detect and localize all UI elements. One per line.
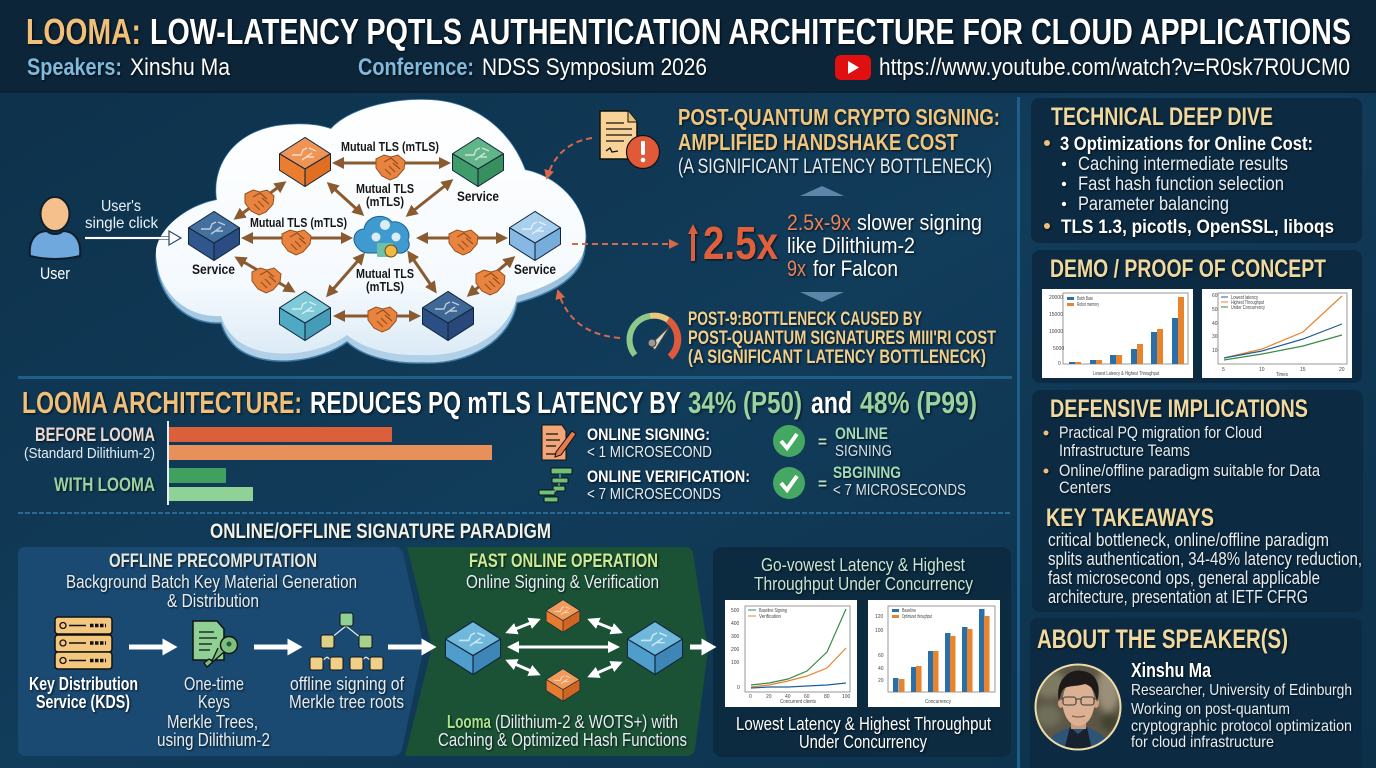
icon: youtube — [835, 55, 871, 80]
heading: Looma architecture — [22, 385, 977, 420]
icon: central cloud with lock — [354, 216, 409, 257]
line chart: demo: Lowest latency — [1231, 295, 1258, 301]
bar chart: throughput: 40 — [878, 666, 884, 672]
result verification text: = — [818, 476, 827, 493]
defensive list: Online/offline paradigm suitable for Data — [1059, 461, 1320, 480]
bar chart: demo: Lowest Latency & Highest Throughput — [1093, 371, 1159, 377]
dashed callout arrows — [547, 138, 677, 338]
bar chart: throughput: 20 — [878, 678, 884, 684]
line chart: demo: Under Concurrency — [1231, 305, 1265, 311]
speakers line: Speakers: — [27, 54, 122, 81]
icon: online verification — [539, 468, 572, 502]
icon: check 1 — [773, 425, 805, 457]
line chart: latency: Verification — [759, 614, 781, 620]
result signing text — [818, 424, 892, 460]
online signing text: ONLINE SIGNING: — [587, 425, 710, 444]
icon: merkle tree — [310, 613, 383, 670]
speaker bio: Working on post-quantum — [1131, 701, 1290, 718]
line chart: latency: 500 — [731, 608, 740, 614]
panel: latency results — [713, 547, 1011, 757]
callout: post-quantum signing cost: AMPLIFIED HANDSHAKE COST — [678, 129, 958, 155]
takeaways text: fast microsecond ops, general applicable — [1048, 568, 1320, 588]
icon: down triangle — [800, 292, 844, 302]
stat description: for Falcon — [813, 256, 898, 281]
bar chart: throughput: 60 — [878, 653, 884, 659]
speaker bio: for cloud infrastructure — [1131, 734, 1274, 751]
label: key distribution service: Key Distribution — [29, 674, 138, 694]
online verification text: < 7 MICROSECONDS — [587, 486, 721, 503]
line chart: latency: 0 — [749, 694, 752, 700]
label: one-time keys: Keys — [198, 692, 230, 712]
bar chart: before and with Looma — [24, 421, 492, 505]
arrow: online to results — [690, 644, 702, 650]
arrow 1 — [129, 644, 163, 650]
bar chart: throughput — [868, 600, 1000, 707]
labels: service and mTLS: (mTLS) — [366, 279, 404, 294]
line chart: latency: 300 — [731, 634, 740, 640]
icon: check 2 — [773, 467, 805, 499]
line chart: latency: 40 — [785, 694, 791, 700]
deep dive list — [1044, 134, 1334, 238]
online heading: FAST ONLINE OPERATION — [469, 551, 658, 572]
online description — [438, 712, 687, 750]
icon: key distribution server — [55, 617, 112, 669]
offline subheading — [66, 572, 357, 611]
conference line: Conference: — [358, 54, 474, 81]
offline subheading: Background Batch Key Material Generation — [66, 572, 357, 592]
online description: Looma — [447, 712, 492, 732]
defensive list — [1044, 423, 1320, 497]
panel: fast online operation — [405, 547, 708, 756]
line chart: demo: 50 — [1212, 307, 1218, 313]
icon: handshakes — [245, 155, 505, 332]
speaker name: Xinshu Ma — [1131, 660, 1212, 682]
panel: demo — [1032, 250, 1362, 383]
bar chart: demo: 20000 — [1049, 295, 1063, 301]
labels: service and mTLS: Service — [514, 261, 556, 277]
line chart: latency: Baseline Signing — [759, 608, 787, 614]
line chart: demo: Highest Throughput — [1231, 300, 1264, 306]
heading: Looma architecture: 48% (P99) — [860, 385, 977, 420]
heading: signature paradigm: ONLINE/OFFLINE SIGNATURE PARADIGM — [210, 520, 551, 543]
results caption — [736, 714, 991, 752]
labels: service and mTLS: Mutual TLS — [356, 266, 414, 281]
results heading — [754, 555, 973, 594]
line chart: demo: 30 — [1212, 334, 1218, 340]
labels: service and mTLS: Service — [192, 261, 235, 277]
offline subheading: & Distribution — [167, 591, 259, 611]
arrow: user to service — [85, 231, 181, 245]
line chart: demo: 10 — [1212, 348, 1218, 354]
bar chart: throughput: 100 — [875, 628, 884, 634]
line chart: latency: 100 — [731, 660, 740, 666]
deep dive list: Caching intermediate results — [1078, 154, 1288, 175]
arrow 3: offline to online — [388, 644, 422, 650]
line chart: demo: 10 — [1259, 367, 1265, 373]
takeaways heading: KEY TAKEAWAYS — [1046, 504, 1214, 532]
deep dive list: 3 Optimizations for Online Cost: — [1060, 134, 1313, 155]
labels: service and mTLS: Mutual TLS — [356, 181, 414, 196]
label: one-time keys: Merkle Trees, — [167, 712, 258, 732]
speaker photo — [1034, 664, 1122, 752]
heading: Looma architecture: and — [811, 385, 852, 420]
bar chart: demo: Batch Base — [1077, 296, 1093, 302]
defensive list: Practical PQ migration for Cloud — [1059, 423, 1262, 442]
icon: online cubes — [446, 600, 682, 701]
line chart: latency: 200 — [731, 647, 740, 653]
panel: defensive implications and takeaways — [1032, 390, 1363, 612]
stat: 2.5x: 2.5x — [703, 217, 778, 269]
line chart: latency: 400 — [731, 621, 740, 627]
callout: post-quantum signing cost: POST-QUANTUM CRYPTO SIGNING: — [678, 104, 1000, 130]
speaker heading: ABOUT THE SPEAKER(S) — [1037, 624, 1288, 654]
bar chart: throughput: Optimized throughput — [902, 614, 932, 620]
defensive list: Centers — [1059, 478, 1111, 497]
icon: service cubes — [189, 138, 560, 340]
defensive heading: DEFENSIVE IMPLICATIONS — [1050, 395, 1308, 423]
labels: service and mTLS: Mutual TLS (mTLS) — [250, 215, 347, 230]
callout: bottleneck: POST-QUANTUM SIGNATURES MIII'RI COST — [688, 328, 996, 349]
line chart: demo: Times — [1276, 372, 1288, 378]
label: one-time keys — [157, 674, 270, 750]
label: one-time keys: using Dilithium-2 — [157, 730, 270, 750]
label: offline signing: Merkle tree roots — [289, 692, 404, 712]
icon: up triangle — [800, 186, 844, 196]
labels: service and mTLS — [192, 139, 556, 294]
bar chart: demo: Robot memory — [1077, 302, 1099, 308]
callout: bottleneck — [688, 309, 996, 368]
results caption: Under Concurrency — [799, 732, 927, 752]
arrows: online exchange — [508, 620, 620, 676]
click label — [85, 198, 159, 232]
result signing text: ONLINE — [835, 424, 888, 443]
callout: bottleneck: POST-9:BOTTLENECK CAUSED BY — [688, 309, 922, 330]
offline heading: OFFLINE PRECOMPUTATION — [109, 551, 317, 572]
deep dive list: Parameter balancing — [1078, 194, 1229, 215]
result verification text: SBGINING — [833, 463, 901, 482]
icon: user: User — [40, 264, 70, 283]
takeaways text — [1048, 530, 1362, 607]
heading: Looma architecture: 34% (P50) — [688, 385, 802, 420]
panel: mTLS cloud diagram — [30, 100, 677, 363]
labels: service and mTLS: (mTLS) — [366, 194, 404, 209]
panel: offline precomputation — [18, 547, 424, 756]
stat description: like Dilithium-2 — [787, 233, 915, 258]
conference line — [358, 54, 707, 81]
icon: online signing — [542, 425, 576, 460]
result signing text: SIGNING — [835, 443, 892, 460]
online description: (Dilithium-2 & WOTS+) with — [495, 712, 678, 732]
stat description: slower signing — [857, 210, 982, 235]
cloud — [156, 100, 586, 363]
line chart: latency: 80 — [824, 694, 830, 700]
labels: service and mTLS: Service — [457, 188, 499, 204]
bar chart: throughput: Baseline — [902, 608, 916, 614]
label: one-time keys: One-time — [184, 674, 244, 694]
line chart: demo: 60 — [1212, 293, 1218, 299]
line chart: latency: 0 — [737, 685, 740, 691]
results heading: Go-vowest Latency & Highest — [761, 555, 965, 575]
icon: signature document warning — [600, 111, 660, 168]
bar chart: demo: 0 — [1058, 361, 1061, 367]
click label: single click — [85, 215, 159, 232]
deep dive list: Fast hash function selection — [1078, 174, 1284, 195]
line chart: demo: 20 — [1339, 367, 1345, 373]
speakers line — [27, 54, 231, 81]
line chart: latency: 60 — [804, 694, 810, 700]
labels: service and mTLS: Mutual TLS (mTLS) — [341, 139, 439, 154]
callout: bottleneck: (A SIGNIFICANT LATENCY BOTTLENECK) — [688, 347, 986, 368]
speaker bio — [1131, 682, 1352, 751]
bar chart: demo: 10000 — [1049, 329, 1063, 335]
line chart: latency — [725, 600, 857, 707]
result verification text: < 7 MICROSECONDS — [833, 482, 966, 499]
bar chart: before and with Looma: (Standard Dilithium-2) — [24, 445, 155, 462]
bar chart: throughput: 120 — [875, 614, 884, 620]
heading: Looma architecture: REDUCES PQ mTLS LATENCY BY — [310, 385, 681, 420]
results heading: Throughput Under Concurrency — [754, 574, 973, 594]
line chart: latency: Concurrent clients — [780, 699, 816, 705]
label: offline signing: offline signing of — [290, 674, 405, 694]
line chart: latency: 20 — [766, 694, 772, 700]
line chart: demo: 15 — [1300, 367, 1306, 373]
panel: about the speaker — [1030, 618, 1362, 768]
bar chart: before and with Looma: WITH LOOMA — [54, 475, 155, 496]
arrow 2 — [254, 644, 288, 650]
stat description: 2.5x-9x — [787, 210, 851, 235]
heading: Looma architecture: LOOMA ARCHITECTURE: — [22, 385, 302, 420]
takeaways text: architecture, presentation at IETF CFRG — [1048, 587, 1308, 607]
bar chart: demo: 5000 — [1053, 346, 1064, 352]
online subheading: Online Signing & Verification — [466, 572, 659, 592]
online verification text: ONLINE VERIFICATION: — [587, 467, 750, 486]
bar chart: demo — [1042, 289, 1193, 378]
label: offline signing — [289, 674, 405, 712]
icon: latency gauge — [630, 316, 678, 357]
connections — [236, 163, 513, 316]
online verification text — [587, 467, 750, 503]
callout: post-quantum signing cost: (A SIGNIFICANT LATENCY BOTTLENECK) — [678, 155, 992, 178]
header band — [0, 0, 1376, 93]
icon: user — [30, 197, 80, 283]
deep dive list: TLS 1.3, picotls, OpenSSL, liboqs — [1061, 217, 1334, 238]
deep dive heading: TECHNICAL DEEP DIVE — [1051, 103, 1273, 131]
speakers line: Xinshu Ma — [130, 54, 231, 81]
title: LOOMA: — [26, 11, 141, 52]
callout: post-quantum signing cost — [678, 104, 1000, 178]
online signing text: < 1 MICROSECOND — [587, 444, 712, 461]
click label: User's — [101, 198, 141, 215]
line chart: demo: 5 — [1222, 367, 1225, 373]
bar chart: demo: 15000 — [1049, 312, 1063, 318]
online description: Caching & Optimized Hash Functions — [438, 730, 687, 750]
stat description: 9x — [787, 256, 806, 281]
icon: one-time keys — [193, 621, 238, 667]
conference line: NDSS Symposium 2026 — [482, 54, 707, 81]
line chart: demo — [1202, 289, 1352, 378]
online signing text — [587, 425, 712, 461]
panel: technical deep dive — [1031, 98, 1362, 243]
result signing text: = — [818, 434, 827, 451]
stat description — [787, 210, 982, 281]
bar chart: throughput: Concurrency — [925, 699, 951, 705]
results caption: Lowest Latency & Highest Throughput — [736, 714, 991, 734]
label: key distribution service — [29, 674, 138, 712]
line chart: demo: 40 — [1212, 321, 1218, 327]
bar chart: before and with Looma: BEFORE LOOMA — [35, 425, 155, 446]
label: key distribution service: Service (KDS) — [36, 692, 130, 712]
speaker bio: cryptographic protocol optimization — [1131, 718, 1352, 735]
defensive list: Infrastructure Teams — [1059, 441, 1190, 460]
result verification text — [818, 463, 966, 499]
takeaways text: critical bottleneck, online/offline paradigm — [1048, 530, 1329, 550]
line chart: latency: 100 — [842, 694, 851, 700]
